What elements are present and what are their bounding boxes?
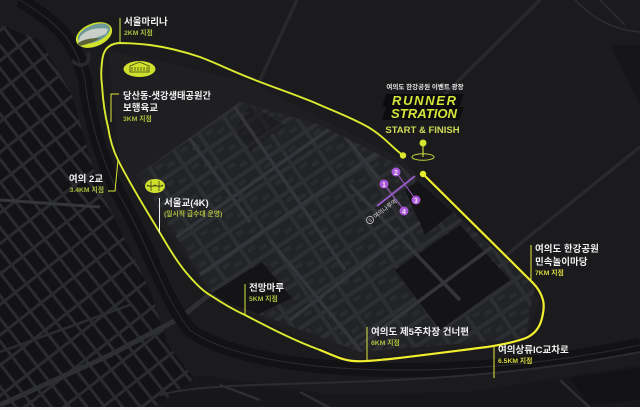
- exit 3: 3: [414, 198, 418, 205]
- base map: south bank: [150, 365, 640, 410]
- icon: bridge badge: [145, 179, 165, 193]
- callout: Jeonmang Maru 5KM: 5KM 지점: [249, 294, 278, 303]
- callout: Dangsan-Saetgang footbridge 3KM: 보행육교: [123, 103, 158, 114]
- callout: Hangang Park folk play yard 7KM: 여의도 한강공원: [535, 243, 599, 255]
- finish marker dot: [420, 171, 426, 177]
- start marker dot: [400, 152, 406, 159]
- exit 4: 4: [402, 209, 406, 216]
- running course route: [101, 43, 544, 361]
- callout: Dangsan-Saetgang footbridge 3KM: 당산동-샛강생태공원간: [123, 90, 211, 102]
- callout: Dangsan-Saetgang footbridge 3KM: [111, 90, 211, 123]
- callout: Jeonmang Maru 5KM: [245, 282, 284, 315]
- logo: Runner Stration: [382, 93, 464, 121]
- subway crossing: Yeouinaru station exits: [377, 168, 420, 216]
- callout: Yeouido parking lot 5 across 6KM: 6KM 지점: [371, 338, 400, 347]
- exit 2: 2: [394, 170, 398, 177]
- callout: Seoul Marina 2KM: 2KM 지점: [124, 28, 153, 37]
- start and finish heading: START & FINISH: [385, 125, 460, 136]
- bottom edge strip: [0, 407, 640, 410]
- callout: Seoul Bridge 4K: (일시적 급수대 운영): [164, 209, 222, 218]
- callout: Seoul Marina 2KM: 서울마리나: [124, 16, 168, 28]
- icon: start and finish pin: [412, 140, 434, 160]
- callout: Yeoui 2 Bridge 3.4KM: 여의 2교: [69, 173, 103, 185]
- icon: park pavilion badge: [124, 61, 156, 77]
- logo: Runner Stration: STRATION: [391, 106, 458, 121]
- callout: Yeouido parking lot 5 across 6KM: 여의도 제5주차장 건너편: [371, 326, 469, 338]
- station label: 5: [368, 217, 374, 224]
- callout: Yeoui upstream IC 6.5KM: [494, 344, 569, 378]
- callout: Hangang Park folk play yard 7KM: 7KM 지점: [535, 268, 564, 277]
- station label: [365, 197, 399, 225]
- callout: Seoul Bridge 4K: [160, 197, 222, 233]
- callout: Yeoui 2 Bridge 3.4KM: 3.4KM 지점: [70, 185, 104, 194]
- event plaza caption: 여의도 한강공원 이벤트 광장: [386, 82, 464, 91]
- callout: Jeonmang Maru 5KM: 전망마루: [249, 282, 284, 294]
- base map: Yeouido island blocks: [137, 102, 534, 352]
- exit 1: 1: [382, 182, 386, 189]
- callout: Yeoui upstream IC 6.5KM: 6.5KM 지점: [498, 356, 532, 365]
- logo: Runner Stration: RUNNER: [392, 93, 457, 108]
- station label: 여의나루역: [372, 197, 399, 220]
- callout: Dangsan-Saetgang footbridge 3KM: 3KM 지점: [123, 114, 152, 123]
- icon: marina photo badge: [72, 17, 116, 53]
- callout: Yeoui 2 Bridge 3.4KM: [69, 160, 118, 194]
- base map: west district street grid: [0, 25, 240, 410]
- callout: Yeouido parking lot 5 across 6KM: [367, 326, 469, 360]
- callout: Seoul Bridge 4K: 서울교(4K): [164, 197, 209, 209]
- callout: Yeoui upstream IC 6.5KM: 여의상류IC교차로: [498, 344, 569, 356]
- callout: Hangang Park folk play yard 7KM: [531, 243, 599, 282]
- callout: Hangang Park folk play yard 7KM: 민속놀이마당: [535, 256, 588, 268]
- callout: Seoul Marina 2KM: [120, 16, 168, 43]
